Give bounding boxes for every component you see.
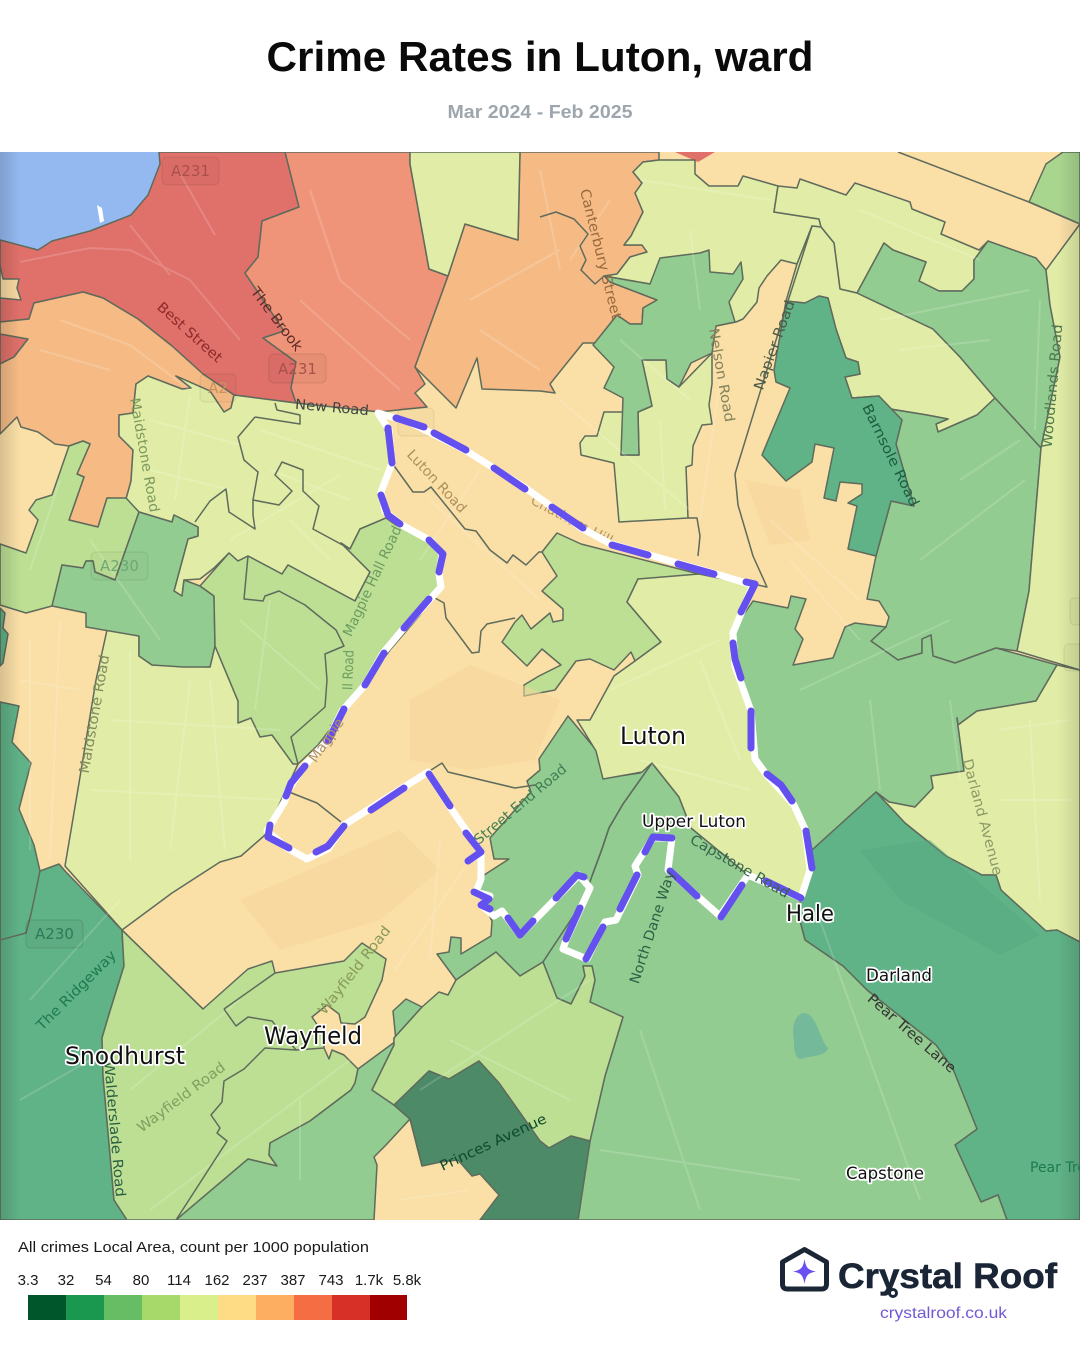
place: Snodhurst: Snodhurst	[65, 1042, 185, 1070]
road: Canterbury Street: Canterbury Street	[576, 187, 624, 322]
road: Napier Road: Napier Road	[751, 298, 799, 392]
area: mid green north east	[857, 241, 1060, 448]
area: light green inside ward	[502, 533, 699, 696]
legend scale labels: 32	[58, 1272, 74, 1289]
shield: A2 near ward	[398, 408, 434, 436]
map edge vignette	[0, 152, 15, 1220]
shield: right edge upper	[1070, 598, 1080, 625]
road: Barnsole Road: Barnsole Road	[858, 402, 922, 509]
road: Magpie fragment: Magpie	[306, 716, 348, 766]
road: Luton Road: Luton Road	[403, 447, 469, 516]
shield: A230 west	[91, 552, 148, 580]
shield: A230 south	[26, 920, 83, 948]
choropleth map	[0, 152, 1080, 1220]
legend	[18, 1239, 422, 1320]
road: Maidstone Road north: Maidstone Road	[126, 397, 162, 514]
place: Wayfield: Wayfield	[264, 1022, 362, 1050]
place: Hale: Hale	[786, 902, 834, 927]
shield: A231 north	[162, 157, 219, 185]
label: Chatham Hill (beneath ward line): Chatham Hill	[528, 493, 615, 549]
legend scale labels: 54	[95, 1272, 112, 1289]
shield: A230 west: A230	[100, 557, 139, 575]
logo wordmark: Crystal Roof	[838, 1257, 1057, 1296]
street network pattern	[20, 165, 1070, 1210]
ward outline white	[267, 413, 810, 959]
road shield labels	[26, 157, 1080, 948]
road: The Ridgeway: The Ridgeway	[33, 948, 120, 1035]
road: Pear Tree Lane: Pear Tree Lane	[864, 991, 959, 1077]
legend scale labels: 237	[242, 1272, 268, 1289]
area: top right corner green	[1029, 152, 1080, 224]
area: mid green west	[52, 512, 215, 667]
place: Darland: Darland	[866, 966, 932, 986]
area: green far west	[0, 702, 127, 1220]
road: New Road: New Road	[294, 397, 369, 419]
area: orange north	[415, 152, 659, 408]
road: Street End Road: Street End Road	[471, 761, 570, 848]
area: green south east	[800, 792, 1080, 1220]
subtle built-up texture patches	[523, 686, 543, 697]
subtitle: date range: Mar 2024 - Feb 2025	[448, 102, 632, 122]
boundary lines in beige areas	[0, 152, 1080, 1220]
legend colour swatches	[28, 1295, 407, 1320]
road: Darland Avenue: Darland Avenue	[959, 757, 1005, 877]
place: Upper Luton: Upper Luton	[642, 812, 746, 832]
road name labels	[33, 187, 1080, 1198]
icon: boat on the river	[97, 205, 104, 223]
area: lime west	[0, 441, 139, 613]
ward outline purple dashes	[268, 418, 812, 959]
road: Best Street: Best Street	[154, 299, 226, 366]
legend scale labels: 743	[318, 1272, 344, 1289]
area: light lime upper	[604, 160, 821, 330]
road: Magpie Hill Road fragment: II Road	[340, 650, 358, 690]
legend scale labels: 162	[204, 1272, 230, 1289]
area: beige fragment at left edge	[0, 265, 21, 300]
place: Capstone: Capstone	[846, 1164, 924, 1184]
area: light lime east strip	[1017, 224, 1080, 670]
shield: A230 south: A230	[35, 925, 74, 943]
ward boundary: Luton	[267, 413, 812, 959]
road: Capstone Road: Capstone Road	[687, 832, 792, 902]
shield: right edge lower	[1064, 644, 1080, 671]
area: lime south west	[102, 930, 386, 1220]
area: light lime north centre	[410, 152, 520, 276]
area: street end green	[437, 716, 652, 980]
legend scale labels: 1.7k	[355, 1272, 384, 1289]
area: mid green east	[867, 398, 1041, 663]
area: mid green north	[593, 250, 743, 455]
road: Wayfield Road west: Wayfield Road	[134, 1060, 229, 1136]
area: light lime south west	[65, 630, 298, 930]
shield: A2: A2	[208, 379, 228, 397]
legend scale labels: 114	[167, 1272, 191, 1289]
legend scale labels: 5.8k	[393, 1272, 422, 1289]
icon: lake in park	[793, 1013, 828, 1059]
area: orange west	[0, 292, 234, 527]
legend scale labels: 387	[280, 1272, 306, 1289]
legend title: All crimes Local Area, count per 1000 population	[18, 1239, 369, 1256]
road: Walderslade Road: Walderslade Road	[100, 1061, 128, 1198]
legend scale labels: 80	[133, 1272, 149, 1289]
area: mid green south centre	[176, 999, 422, 1220]
logo: Crystal Roof	[782, 1250, 1057, 1322]
road: The Brook: The Brook	[246, 284, 306, 356]
title: Crime Rates in Luton, ward	[266, 33, 814, 80]
area: light lime south east	[876, 665, 1080, 942]
area: high crime salmon	[245, 152, 448, 412]
green banding in the south east	[926, 840, 954, 861]
area: light lime west centre	[119, 376, 396, 601]
shield: A231 centre: A231	[278, 360, 317, 378]
area: lime centre west	[200, 518, 442, 764]
shield: A231 centre	[269, 354, 326, 383]
icon: key ring on wordmark y	[890, 1290, 896, 1296]
road: Magpie Hall Road: Magpie Hall Road	[340, 524, 406, 639]
icon: house with star	[782, 1250, 826, 1289]
road: Wayfield Road east: Wayfield Road	[315, 923, 394, 1018]
area: large mid green south	[543, 763, 1007, 1220]
area: very high crime red	[0, 152, 299, 403]
road: Princes Avenue: Princes Avenue	[437, 1111, 549, 1175]
logo url: crystalroof.co.uk	[880, 1305, 1008, 1322]
place name labels	[65, 722, 932, 1184]
legend scale labels	[18, 1272, 422, 1289]
shield: A2	[200, 374, 236, 402]
area: lime south centre	[372, 952, 623, 1148]
road: North Dane Way: North Dane Way	[627, 869, 679, 986]
shield: A231 north: A231	[171, 162, 210, 180]
water: river	[0, 152, 160, 250]
area: Luton light lime inside ward	[577, 574, 810, 898]
area: green centre east	[762, 296, 914, 556]
area: lowest crime dark green	[394, 1061, 590, 1220]
legend scale labels: 3.3	[18, 1272, 38, 1289]
road: Maidstone Road south: Maidstone Road	[77, 654, 113, 775]
area: mid green lower east	[733, 596, 1057, 850]
road: Woodlands Road: Woodlands Road	[1040, 324, 1066, 449]
place: Luton: Luton	[620, 722, 686, 750]
road: Nelson Road: Nelson Road	[705, 327, 737, 423]
